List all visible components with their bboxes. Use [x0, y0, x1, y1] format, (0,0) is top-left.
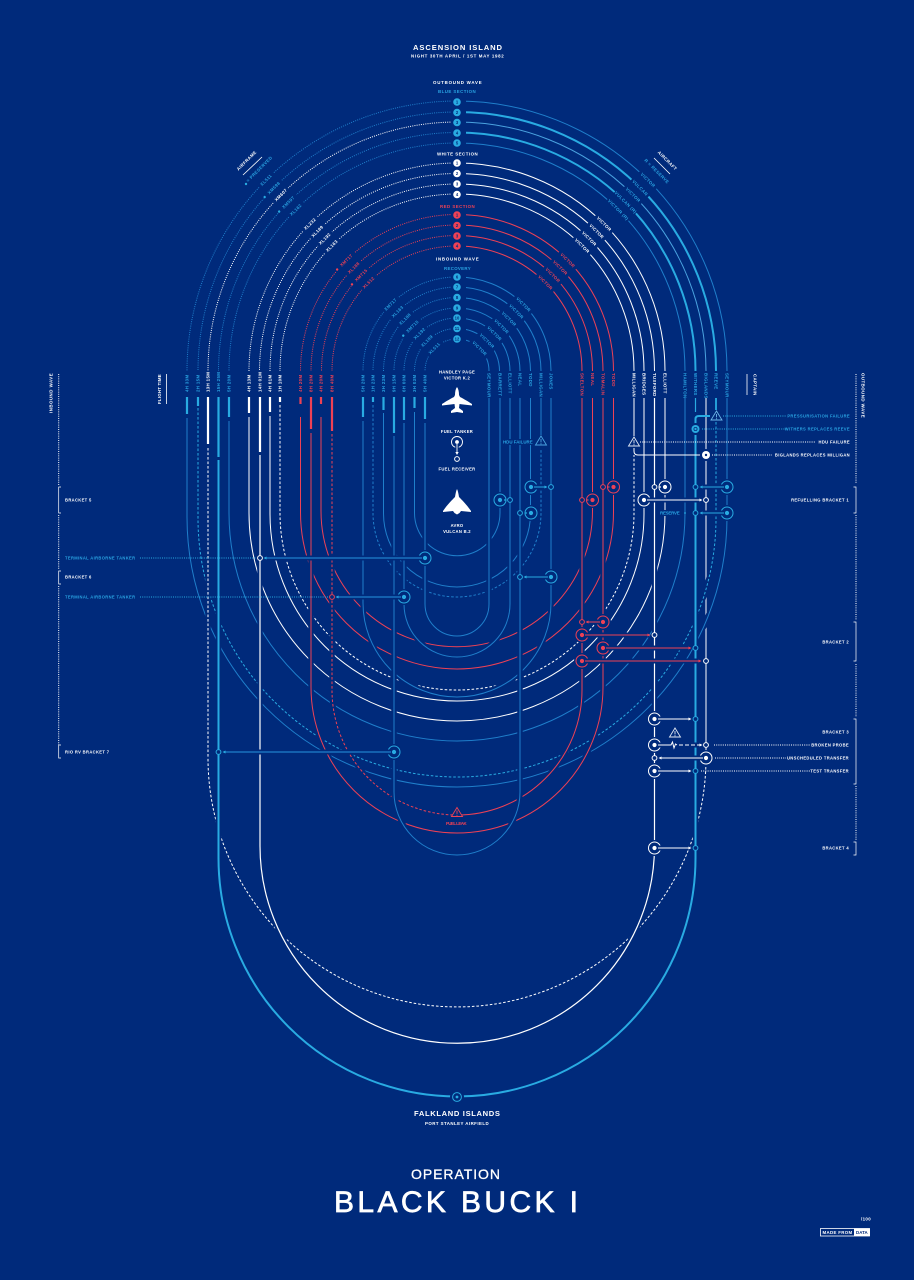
captain names: JONES — [548, 373, 554, 390]
airframe labels on left arcs: XM598 — [267, 180, 281, 195]
airframe labels on left arcs: XM597 — [281, 195, 296, 210]
airframe key: = PRESERVED — [245, 155, 273, 183]
section heading: outbound wave blue: OUTBOUND WAVE — [433, 80, 482, 85]
aircraft labels on right arcs: VICTOR — [581, 230, 598, 247]
aircraft labels on right arcs: VULCAN — [631, 179, 649, 197]
title: OPERATION — [411, 1166, 500, 1182]
fuel leak warning: FUEL LEAK — [446, 821, 467, 826]
flight time values: 6H 00M — [402, 375, 406, 392]
aircraft labels on right arcs: VICTOR — [515, 296, 532, 313]
flight time values: 3H 23M — [381, 375, 386, 392]
tanker leaders, left side — [65, 556, 328, 600]
aircraft labels on right arcs — [469, 169, 659, 359]
legend: victor aircraft: VICTOR K.2 — [444, 376, 470, 380]
aircraft labels on right arcs: VICTOR — [479, 333, 496, 350]
airframe labels on left arcs: XM717 — [339, 253, 354, 268]
event leaders, right side: HDU FAILURE — [819, 440, 850, 444]
aircraft labels on right arcs: VICTOR — [559, 252, 576, 269]
aircraft labels on right arcs: VICTOR — [471, 340, 488, 357]
destination label — [414, 1109, 500, 1126]
outbound arcs: top half, left dotted and right solid — [187, 96, 727, 371]
aircraft labels on right arcs: VICTOR — [625, 187, 642, 204]
captain names: HAMILTON — [682, 373, 688, 399]
legend: fuel tanker and receiver — [439, 429, 475, 472]
numbered wave markers: 10 — [455, 316, 460, 320]
inbound wave side scale — [48, 373, 110, 758]
column header: captain: CAPTAIN — [752, 374, 758, 396]
made from data badge — [820, 1228, 870, 1236]
transfer nodes: recovery blue — [492, 479, 559, 585]
aircraft labels on right arcs: VICTOR — [544, 267, 561, 284]
airframe labels on left arcs: XL163 — [325, 239, 339, 253]
flight time values: 8H 20M — [308, 375, 314, 392]
section heading: white section: WHITE SECTION — [437, 152, 478, 156]
flight time values: 4H 13M — [246, 375, 252, 392]
captain names — [486, 373, 730, 399]
captain names: TUXFORD — [652, 373, 657, 397]
captain names: NEAL — [518, 373, 522, 386]
event leaders, right side: PRESSURISATION FAILURE — [787, 414, 850, 418]
top heading: ascension island: ASCENSION ISLAND — [413, 43, 503, 52]
captain names: NEAL — [590, 373, 595, 386]
aircraft labels on right arcs: VICTOR — [640, 172, 657, 189]
numbered wave markers: 12 — [455, 336, 460, 342]
numbered wave markers: 3 — [456, 182, 459, 186]
event leaders, right side: BROKEN PROBE — [811, 742, 849, 748]
fuel leak warning — [446, 808, 467, 826]
aircraft key: AIRCRAFT — [657, 150, 678, 171]
numbered wave markers: 8 — [456, 295, 459, 300]
airframe labels on left arcs: XM607 — [274, 187, 288, 202]
flight time values: 4H 01M — [268, 375, 272, 392]
captain names: BARRETT — [498, 373, 502, 396]
section heading: outbound wave blue — [433, 80, 482, 94]
airframe labels on left arcs: XL189 — [420, 334, 434, 348]
flight time values: 1H 23M — [370, 375, 376, 392]
replacement markers — [690, 423, 712, 461]
flight time values: 4H 20M — [318, 375, 324, 392]
aircraft labels on right arcs: VULCAN (R) — [614, 190, 638, 215]
flight time values: 2H 15M — [196, 375, 200, 392]
captain names: SEYMOUR — [486, 373, 492, 398]
made from data badge: DATA — [856, 1230, 868, 1235]
airframe labels on left arcs: XL189 — [310, 224, 324, 238]
captain names: TODD — [611, 373, 616, 387]
numbered wave markers: 9 — [456, 306, 459, 310]
title — [334, 1166, 578, 1219]
outbound wave side scale: REFUELLING BRACKET 1 — [791, 498, 849, 502]
aircraft labels on right arcs: VICTOR — [552, 259, 569, 276]
numbered wave markers: 2 — [456, 171, 459, 176]
destination label: PORT STANLEY AIRFIELD — [425, 1121, 489, 1126]
airframe labels on left arcs: XL232 — [303, 217, 317, 231]
aircraft labels on right arcs: VICTOR — [486, 325, 503, 342]
warning icons — [536, 411, 722, 737]
numbered wave markers: 7 — [456, 284, 459, 290]
flight time values: 4H 20M — [298, 375, 303, 392]
top heading: ascension island: NIGHT 30TH APRIL / 1ST MAY 1982 — [411, 54, 504, 58]
numbered wave markers: 1 — [456, 100, 459, 104]
numbered wave markers: 4 — [456, 192, 459, 197]
column header: flight time — [157, 374, 166, 404]
legend: fuel tanker and receiver: FUEL TANKER — [441, 429, 473, 434]
captain names: BRIDGES — [642, 373, 646, 395]
aircraft key — [643, 150, 678, 185]
numbered wave markers: 3 — [456, 120, 459, 125]
event leaders, right side: TEST TRANSFER — [810, 768, 849, 774]
flight time values: 14H 01M — [258, 372, 262, 392]
inbound wave side scale: BRACKET 6 — [65, 574, 92, 580]
aircraft labels on right arcs: VICTOR — [574, 237, 591, 255]
flight time values: 8H 40M — [330, 375, 334, 392]
flight time values: 5H 20M — [360, 375, 366, 392]
transfer nodes: red — [574, 479, 708, 669]
inbound wave side scale: INBOUND WAVE — [48, 373, 54, 413]
inbound wave side scale: RIO RV BRACKET 7 — [65, 750, 110, 754]
outbound wave side scale: BRACKET 4 — [822, 846, 849, 850]
flight time values: 15H 25M — [216, 372, 221, 392]
event leaders, right side — [640, 414, 850, 774]
event leaders, right side: UNSCHEDULED TRANSFER — [787, 756, 849, 760]
section heading: red section: RED SECTION — [440, 204, 475, 209]
transfer nodes: white — [636, 479, 714, 856]
legend: victor aircraft — [439, 370, 475, 413]
flight time values — [184, 372, 428, 392]
aircraft labels on right arcs: VICTOR (R) — [607, 198, 630, 221]
flight time values: 5H 20M — [226, 375, 232, 392]
numbered wave markers: 6 — [456, 274, 459, 280]
captain names: REEVE — [714, 373, 718, 390]
numbered wave markers: 1 — [456, 160, 459, 166]
legend: vulcan aircraft: VULCAN B.2 — [443, 529, 471, 534]
made from data badge: MADE FROM — [822, 1230, 852, 1235]
aircraft labels on right arcs: VICTOR — [508, 303, 525, 320]
captain names: BIGLANDS — [704, 373, 708, 399]
tanker leaders, left side: TERMINAL AIRBORNE TANKER — [65, 556, 135, 560]
airframe key — [236, 150, 273, 185]
airframe labels on left arcs: XL192 — [318, 232, 332, 246]
inline label: hdu failure recovery: HDU FAILURE — [503, 440, 533, 445]
flight time bars — [187, 397, 425, 457]
numbered wave markers: 3 — [456, 234, 459, 238]
section heading: inbound wave recovery: INBOUND WAVE — [436, 256, 479, 262]
airframe labels on left arcs: XL188 — [398, 312, 412, 326]
flight time values: 3H 03M — [412, 375, 417, 392]
edition number: /100 — [861, 1216, 871, 1222]
outbound wave side scale: BRACKET 3 — [822, 730, 849, 734]
column header: flight time: FLIGHT TIME — [157, 374, 162, 404]
airframe labels on left arcs — [257, 171, 444, 358]
section heading: outbound wave blue: BLUE SECTION — [438, 89, 476, 94]
airframe labels on left arcs: XL192 — [413, 326, 427, 340]
legend: fuel tanker and receiver: FUEL RECEIVER — [439, 466, 475, 472]
legend: vulcan aircraft — [443, 489, 471, 534]
airframe labels on left arcs: XL511 — [427, 341, 441, 355]
aircraft labels on right arcs: VICTOR — [596, 216, 613, 233]
numbered wave markers: 4 — [456, 244, 459, 248]
top heading: ascension island — [411, 43, 504, 58]
aircraft labels on right arcs: VICTOR — [501, 311, 518, 328]
flight time values: 5H 40M — [422, 375, 428, 392]
numbered wave markers: 2 — [456, 110, 459, 115]
inline label: reserve: RESERVE — [660, 511, 680, 516]
airframe labels on left arcs: XM715 — [405, 319, 420, 334]
transfer nodes: outbound blue — [693, 479, 735, 521]
legend: vulcan aircraft: AVRO — [451, 523, 464, 528]
captain names: ELLIOTT — [508, 373, 512, 394]
destination label: FALKLAND ISLANDS — [414, 1109, 500, 1118]
outbound wave side scale — [791, 373, 866, 855]
numbered wave markers: 2 — [456, 223, 459, 228]
flight time values: 4H 33M — [184, 375, 190, 392]
aircraft key: R = RESERVE — [643, 158, 670, 185]
flight time values: 9H 15M — [392, 375, 396, 392]
terminal tanker links — [216, 550, 433, 760]
return tracks: lower arcs and verticals — [187, 398, 727, 1096]
airframe labels on left arcs: XL511 — [259, 173, 273, 187]
numbered wave markers: 11 — [455, 326, 460, 331]
falkland islands node — [450, 1090, 464, 1104]
section heading: inbound wave recovery — [436, 256, 479, 271]
airframe key: AIRFRAME — [236, 150, 258, 172]
captain names: SKELTON — [580, 373, 584, 396]
title: BLACK BUCK I — [334, 1186, 578, 1219]
aircraft labels on right arcs: VICTOR — [493, 318, 510, 335]
airframe labels on left arcs: XL188 — [347, 261, 361, 275]
legend: victor aircraft: HANDLEY PAGE — [439, 370, 475, 374]
inbound wave side scale: BRACKET 5 — [65, 498, 92, 502]
airframe labels on left arcs: XL512 — [362, 276, 376, 290]
airframe labels on left arcs: XL162 — [289, 203, 303, 217]
numbered wave markers: 5 — [456, 140, 459, 146]
airframe labels on left arcs: XM715 — [354, 268, 369, 282]
numbered wave markers: 4 — [456, 130, 459, 136]
captain names: TOMALIN — [600, 373, 606, 395]
captain names: TODD — [528, 373, 533, 387]
airframe labels on left arcs: XM717 — [383, 297, 398, 312]
captain names: MILLIGAN — [632, 373, 636, 397]
captain names: ELLIOTT — [662, 373, 668, 394]
event leaders, right side: BIGLANDS REPLACES MILLIGAN — [775, 452, 850, 458]
outbound wave side scale: BRACKET 2 — [822, 640, 849, 644]
flight time values: 1H 10M — [278, 375, 282, 392]
captain names: WITHERS — [693, 373, 698, 396]
airframe labels on left arcs: XL163 — [391, 304, 405, 319]
aircraft labels on right arcs: VICTOR — [537, 274, 554, 291]
captain names: SEYMOUR — [724, 373, 730, 398]
event leaders, right side: WITHERS REPLACES REEVE — [785, 426, 850, 432]
aircraft labels on right arcs: VICTOR — [588, 223, 605, 240]
inline label: reserve — [659, 510, 686, 516]
captain names: MILLIGAN — [538, 373, 544, 397]
numbered wave markers: 1 — [456, 212, 459, 218]
outbound wave side scale: OUTBOUND WAVE — [860, 373, 866, 418]
numbered wave markers — [453, 98, 461, 343]
tanker leaders, left side: TERMINAL AIRBORNE TANKER — [65, 594, 135, 600]
section heading: inbound wave recovery: RECOVERY — [444, 266, 471, 271]
column header: captain — [747, 374, 758, 396]
flight time values: 13H 15M — [206, 372, 210, 392]
